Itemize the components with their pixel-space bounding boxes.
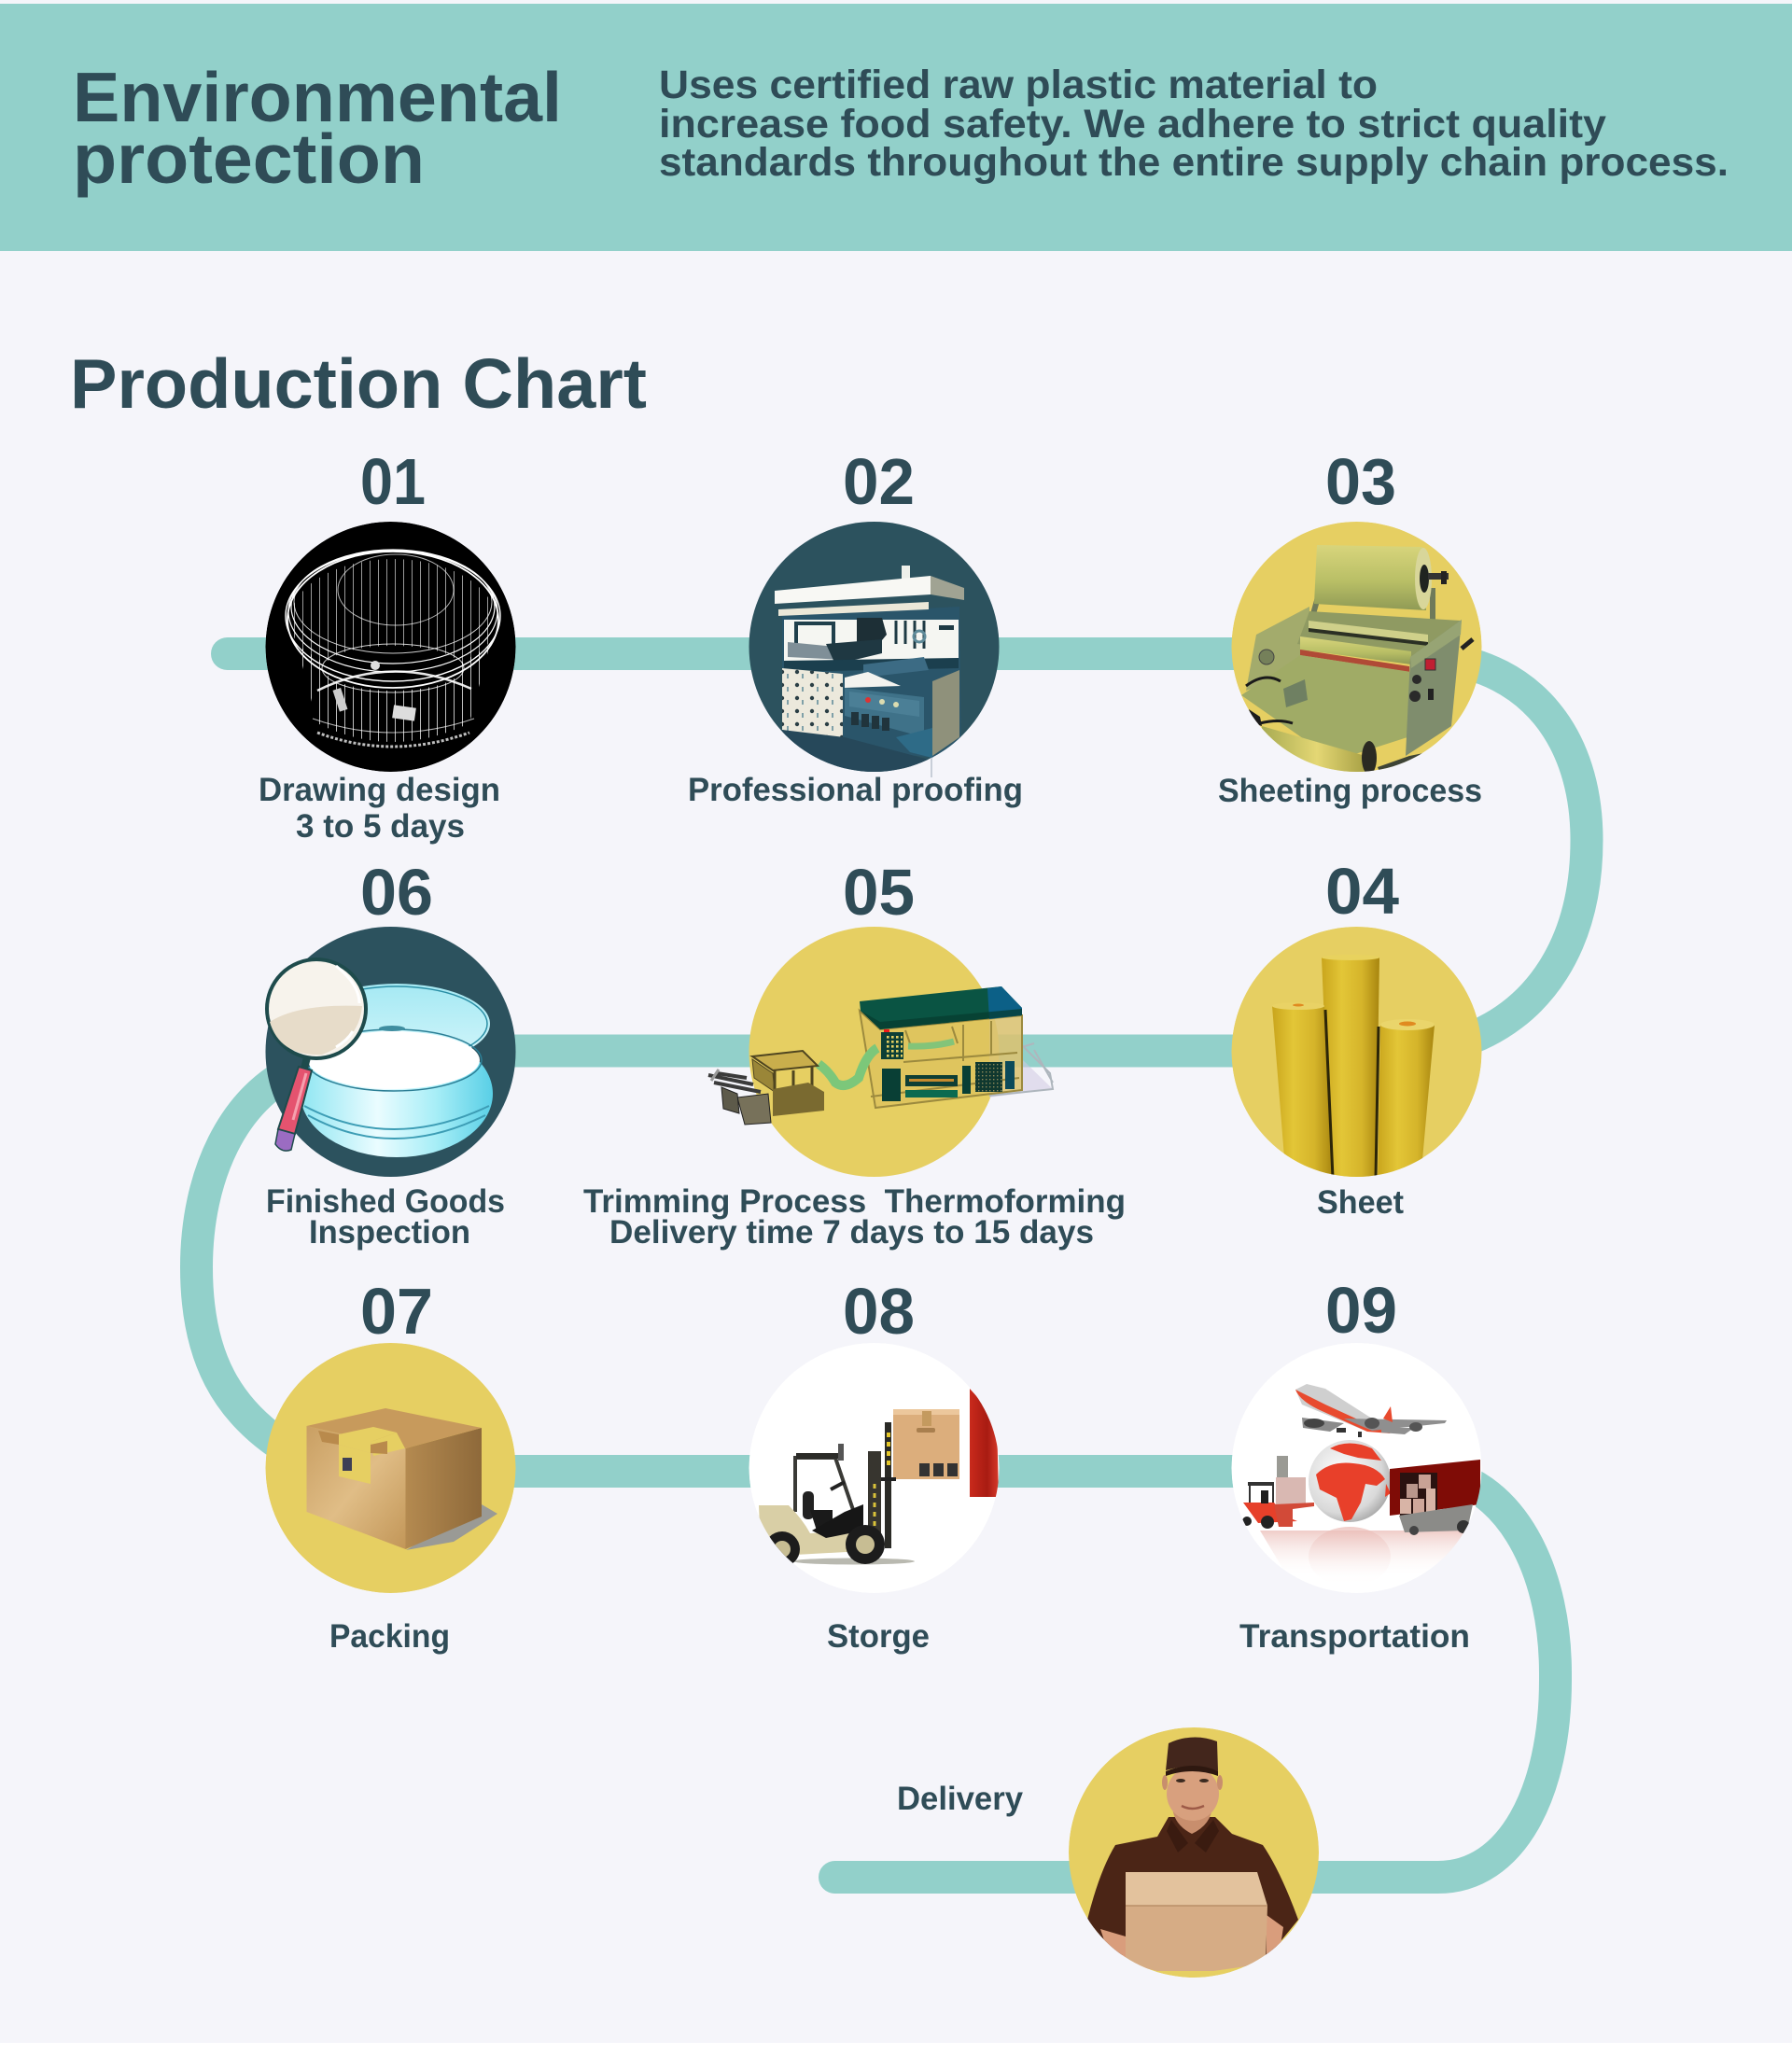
number 06: 06 [360,856,433,929]
heading: Environmental protection [73,58,562,198]
icon: proofing machine [749,522,999,777]
step 03: sheeting process [1218,445,1482,809]
step 04: sheet [1232,855,1482,1221]
header description: increase food safety. We adhere to strict quality [659,102,1606,147]
header band [0,4,1792,251]
icon: thermoforming line [708,927,1053,1177]
step 07: packing [265,1275,515,1655]
heading: Production Chart: Production Chart [70,344,647,423]
number 09: 09 [1325,1274,1397,1347]
label: finished goods inspection: Inspection [309,1214,470,1251]
step 09: transportation [1232,1274,1482,1655]
label: sheet: Sheet [1317,1184,1404,1221]
label: sheeting process: Sheeting process [1218,773,1482,809]
label: trimming process, thermoforming, delivery time [583,1183,1126,1251]
step 08: storage [749,1275,999,1655]
label: trimming process, thermoforming, delivery time: Delivery time 7 days to 15 days [609,1214,1094,1251]
icon: gold sheet rolls [1232,927,1482,1181]
step 06: finished goods inspection [265,856,515,1251]
label: finished goods inspection: Finished Goods [266,1183,505,1220]
icon: petri dish and magnifier [265,927,515,1177]
header description: Uses certified raw plastic material to [659,63,1378,107]
step 01: drawing design [259,445,515,845]
number 07: 07 [360,1275,433,1348]
number 01: 01 [360,445,426,518]
step 05: trimming and thermoforming [583,856,1126,1251]
step 02: professional proofing [688,445,1023,808]
icon: forklift with box [749,1343,999,1593]
icon: laminating machine [1232,522,1482,776]
final step: delivery [897,1727,1319,1978]
label: professional proofing: Professional proofing [688,772,1023,808]
label: trimming process, thermoforming, delivery time: Trimming Process Thermoforming [583,1183,1126,1220]
icon: wireframe bowl [265,522,515,772]
number 04: 04 [1325,855,1399,928]
label: transportation: Transportation [1239,1618,1470,1655]
icon: cardboard box [265,1343,515,1593]
number 02: 02 [843,445,915,518]
number 03: 03 [1325,445,1396,518]
label: finished goods inspection [266,1183,505,1251]
process track [196,653,1587,1878]
header description: standards throughout the entire supply chain process. [659,140,1729,185]
heading: Environmental protection: protection [73,119,425,198]
icon: plane, globe, truck and forklift [1232,1343,1482,1593]
number 08: 08 [843,1275,915,1348]
header description [659,63,1729,185]
label: drawing design: Drawing design [259,772,500,808]
number 05: 05 [843,856,915,929]
label: drawing design: 3 to 5 days [296,808,465,845]
label: delivery: Delivery [897,1781,1024,1817]
label: storge: Storge [827,1618,930,1655]
heading: Environmental protection: Environmental [73,58,562,136]
icon: delivery man holding box [1069,1727,1319,1978]
label: packing: Packing [329,1618,450,1655]
label: drawing design [259,772,500,845]
